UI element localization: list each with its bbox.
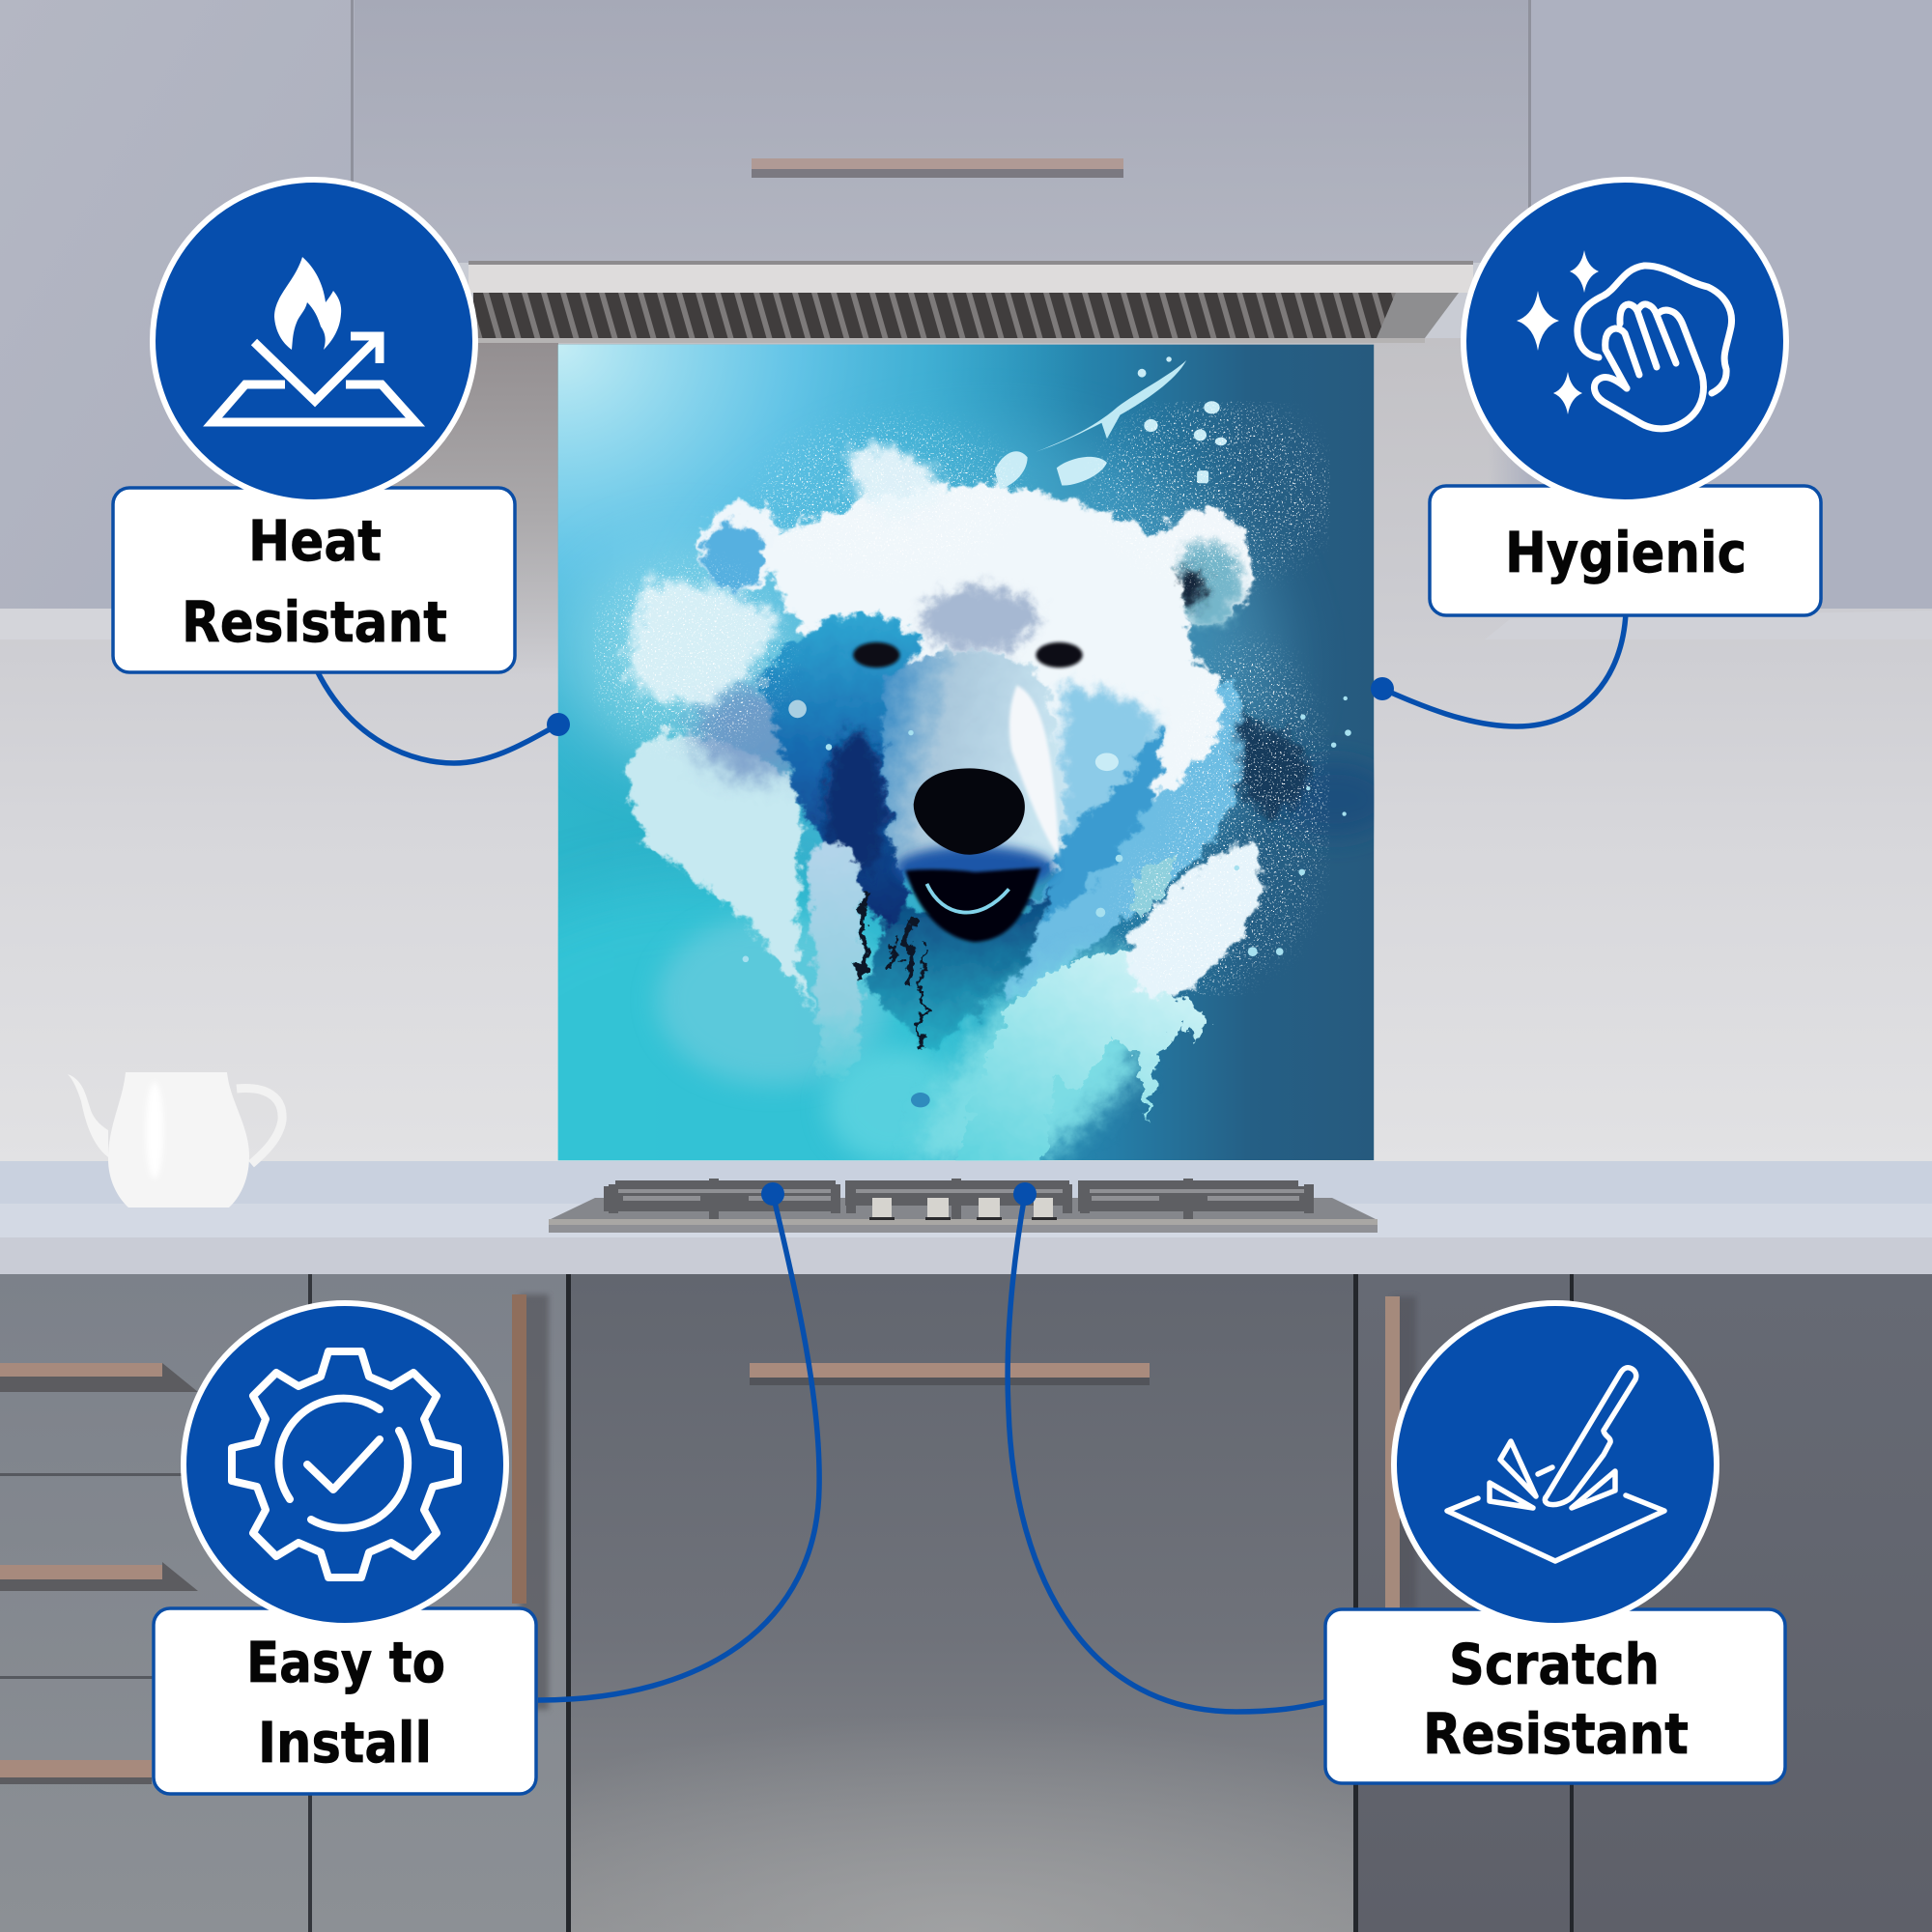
chin fur: [868, 884, 1054, 1051]
left snow splash: [628, 582, 779, 709]
lip: [926, 884, 1009, 913]
connector: hygienic: [1371, 612, 1626, 726]
chin shade: [895, 845, 1054, 891]
label: scratch resistant: Resistant: [1423, 1701, 1689, 1767]
forehead shade: [922, 587, 1038, 651]
label: heat resistant: [113, 488, 515, 672]
vertical door handles: [512, 1294, 1416, 1710]
upper cabinets: [0, 0, 1932, 639]
label: easy to install: Easy to: [246, 1630, 445, 1695]
bottom mist: [657, 916, 964, 1165]
nose: [914, 768, 1025, 855]
ice chunks: [788, 356, 1227, 1107]
badge: scratch resistant: [1394, 1303, 1717, 1626]
left fur: [762, 614, 924, 926]
badge: hygienic: [1463, 180, 1786, 502]
connector: heat resistant: [316, 668, 570, 763]
lower right fur: [1040, 724, 1163, 923]
paw ice: [1133, 856, 1173, 921]
grey-blue shoulder shade: [694, 683, 821, 778]
painted bear body: [628, 446, 1308, 1176]
muzzle: [883, 650, 1062, 870]
panel background: [558, 344, 1374, 1161]
icon: knife scratching surface: [1447, 1368, 1664, 1561]
label: scratch resistant: [1325, 1609, 1785, 1783]
wall: [0, 338, 1932, 1169]
connector: scratch resistant: [1008, 1182, 1324, 1712]
top snow splash: [847, 446, 943, 521]
bottom splash: [953, 952, 1208, 1176]
splash halo: [785, 427, 1301, 902]
worktop: [0, 1204, 1932, 1274]
ears: [697, 503, 1254, 627]
badge: easy to install: [184, 1303, 506, 1626]
dripping fur: [860, 895, 924, 1048]
right paw: [1128, 841, 1261, 997]
ice streak: [1036, 360, 1186, 452]
gas hob: [549, 1179, 1378, 1233]
range hood: [469, 261, 1473, 343]
badge: heat resistant: [153, 180, 475, 502]
label: hygienic: Hygienic: [1505, 520, 1747, 585]
eyes: [853, 642, 1083, 668]
icon: hand wiping with sparkles: [1517, 250, 1732, 429]
connector: easy to install: [538, 1182, 819, 1700]
backsplash band: [0, 1161, 1932, 1206]
dark splatter: [1239, 703, 1308, 815]
ice column: [809, 842, 861, 1079]
centre drawer handle: [750, 1363, 1150, 1385]
polar bear splashback panel: [558, 344, 1374, 1161]
bear head: [762, 483, 1224, 841]
label: hygienic: [1430, 486, 1821, 615]
muzzle stripe: [1009, 685, 1060, 858]
dark under-eye fur: [825, 733, 886, 876]
teapot: [68, 1072, 282, 1208]
label: easy to install: [154, 1608, 536, 1794]
label: scratch resistant: Scratch: [1449, 1632, 1660, 1697]
drawer handles: [0, 1363, 198, 1784]
base cabinets: [0, 1274, 1932, 1932]
small droplets: [743, 696, 1351, 962]
cabinet handle: [752, 158, 1123, 178]
icon: gear with check mark: [232, 1351, 458, 1577]
mouth: [905, 867, 1040, 942]
label: heat resistant: Heat: [248, 508, 382, 574]
label: heat resistant: Resistant: [182, 589, 447, 655]
label: easy to install: Install: [258, 1710, 432, 1776]
icon: flame over surface with deflecting arrow: [213, 257, 415, 422]
bear body right: [975, 683, 1243, 1001]
right cheek fur: [1060, 688, 1160, 858]
speckle: [593, 402, 1329, 995]
left shoulder: [629, 733, 815, 1016]
bottom splash glow: [916, 952, 1144, 1160]
